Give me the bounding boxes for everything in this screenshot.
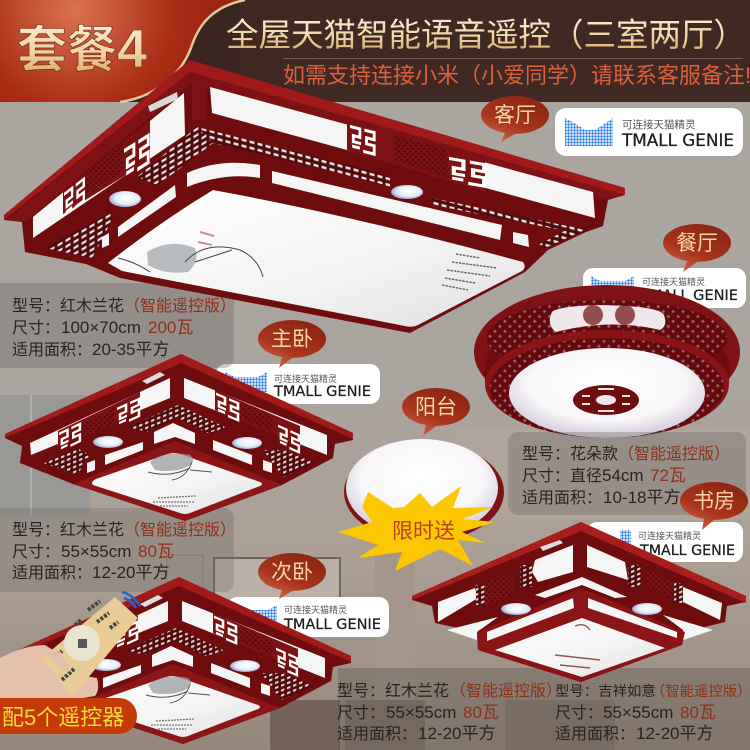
centre frame — [477, 588, 685, 682]
label strip: bottom — [338, 668, 750, 750]
label panel: master bedroom lamp: 12-20平方 — [92, 563, 169, 582]
subtitle: 如需支持连接小米（小爱同学）请联系客服备注! — [283, 63, 750, 88]
genie badge: dining room: 可连接天猫精灵 — [642, 276, 705, 287]
label panel: master bedroom lamp: 型号：红木兰花 — [12, 522, 124, 539]
speech bubble: master bedroom: 主卧 — [271, 328, 313, 351]
genie badge: study: TMALL GENIE — [639, 543, 735, 559]
speech bubble: living room: 客厅 — [494, 104, 536, 127]
label text: lamp two at bottom: 12-20平方 — [636, 724, 713, 743]
speech bubble: balcony — [402, 388, 470, 436]
label panel: dining room lamp: 10-18平方 — [603, 488, 680, 507]
speech bubble: second bedroom — [258, 553, 326, 599]
label text: lamp one at bottom: 80瓦 — [463, 703, 499, 722]
label panel: dining room lamp — [508, 432, 746, 515]
icon: wireless signal — [122, 592, 140, 608]
lamp: second bedroom square ceiling light — [3, 577, 351, 744]
label panel: living room lamp: 200瓦 — [148, 318, 193, 337]
speech bubble: balcony: 阳台 — [415, 396, 457, 419]
starburst: limited-time gift: 限时送 — [392, 520, 455, 543]
label text: lamp two at bottom: 尺寸： — [555, 705, 603, 722]
main diffuser panel with ink painting — [108, 190, 525, 327]
label panel: dining room lamp: 适用面积： — [522, 490, 602, 507]
header band — [0, 0, 750, 102]
carved fret panels — [63, 118, 485, 216]
lattice bands — [45, 127, 587, 258]
genie badge: second bedroom: TMALL GENIE — [283, 617, 381, 633]
label text: lamp two at bottom: 适用面积： — [555, 726, 635, 743]
genie badge: study: 可连接天猫精灵 — [638, 530, 701, 541]
label panel: master bedroom lamp: 80瓦 — [138, 542, 174, 561]
speech bubble: second bedroom: 次卧 — [271, 561, 313, 584]
label text: lamp two at bottom: 80瓦 — [680, 703, 716, 722]
label text: lamp two at bottom: 55×55cm — [603, 703, 673, 722]
label text: lamp one at bottom: 55×55cm — [386, 703, 456, 722]
genie badge: master bedroom: 可连接天猫精灵 — [274, 373, 337, 384]
label panel: dining room lamp: 尺寸：直径54cm — [522, 466, 644, 485]
label panel: master bedroom lamp: 适用面积： — [12, 565, 92, 582]
genie badge: study — [587, 522, 743, 562]
inner white strips — [102, 163, 529, 248]
label panel: master bedroom lamp: 尺寸： — [12, 544, 60, 561]
genie badge: master bedroom — [216, 364, 380, 404]
badge: comes with 5 remotes — [0, 698, 137, 734]
starburst: limited-time gift — [338, 486, 495, 571]
badge: comes with 5 remotes: 配5个遥控器 — [2, 705, 124, 730]
genie badge: living room: TMALL GENIE — [621, 131, 734, 150]
speech bubble: dining room — [663, 224, 731, 272]
label panel: living room lamp: 适用面积： — [12, 342, 92, 359]
label panel: living room lamp: 型号：红木兰花 — [12, 298, 124, 315]
speech bubble: study: 书房 — [693, 490, 735, 513]
speech bubble: living room — [481, 96, 549, 142]
main title: 全屋天猫智能语音遥控（三室两厅） — [226, 17, 746, 53]
carved medallion — [573, 385, 639, 415]
lamp: living room rectangular ceiling light — [4, 60, 625, 333]
label panel: living room lamp: （智能遥控版） — [132, 297, 228, 315]
genie badge: second bedroom — [227, 597, 389, 637]
genie badge: dining room: TMALL GENIE — [640, 288, 738, 304]
lamp: master bedroom square ceiling light — [5, 354, 353, 521]
label panel: living room lamp: 20-35平方 — [92, 340, 169, 359]
package title: 套餐4 — [17, 19, 147, 79]
label panel: master bedroom lamp: （智能遥控版） — [132, 521, 228, 539]
speech bubble: dining room: 餐厅 — [676, 232, 718, 255]
genie badge: living room: 可连接天猫精灵 — [622, 118, 696, 131]
icon: hand holding remote control — [0, 592, 140, 702]
lamp: balcony round ceiling light — [344, 439, 504, 542]
label text: lamp one at bottom: 型号：红木兰花 — [337, 683, 449, 700]
lamp: study square ceiling light — [412, 522, 746, 682]
genie badge: second bedroom: 可连接天猫精灵 — [284, 604, 347, 615]
red tab with gold curve — [0, 0, 245, 102]
carved flowers on rim — [583, 305, 635, 325]
label panel: dining room lamp: 型号：花朵款 — [522, 446, 618, 463]
label text: lamp one at bottom: 尺寸： — [337, 705, 385, 722]
label panel: dining room lamp: （智能遥控版） — [626, 445, 722, 463]
label panel: living room lamp: 100×70cm — [61, 318, 141, 337]
genie badge: master bedroom: TMALL GENIE — [273, 384, 371, 400]
label text: lamp one at bottom — [337, 682, 554, 743]
genie badge: dining room — [583, 268, 746, 308]
label panel: master bedroom lamp: 55×55cm — [61, 542, 131, 561]
label text: lamp two at bottom: （智能遥控版） — [658, 683, 744, 700]
lamp: dining room round flower ceiling light — [474, 285, 740, 438]
label text: lamp one at bottom: （智能遥控版） — [458, 682, 554, 700]
label panel: dining room lamp: 72瓦 — [650, 466, 686, 485]
label panel: living room lamp — [0, 283, 234, 368]
label panel: master bedroom lamp — [0, 508, 234, 592]
label text: lamp two at bottom — [555, 682, 744, 743]
genie badge: living room — [555, 108, 743, 156]
speech bubble: study — [680, 482, 748, 530]
label panel: living room lamp: 尺寸： — [12, 320, 60, 337]
speech bubble: master bedroom — [258, 320, 326, 368]
label text: lamp one at bottom: 适用面积： — [337, 726, 417, 743]
label text: lamp two at bottom: 型号：吉祥如意 — [555, 684, 656, 700]
label text: lamp one at bottom: 12-20平方 — [418, 724, 495, 743]
